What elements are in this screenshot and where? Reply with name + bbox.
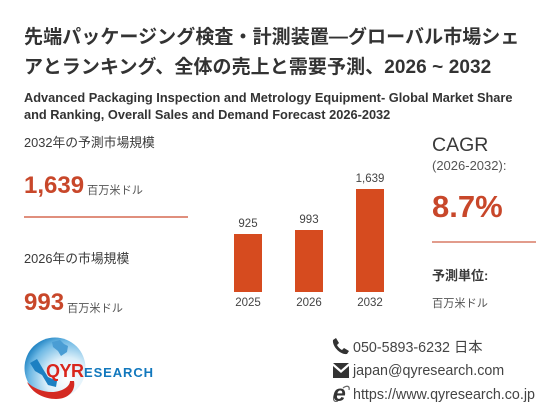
unit: million USD 2026: 百万米ドル [67, 303, 123, 315]
title: 先端パッケージング検査・計測装置—グローバル市場シェ [24, 27, 520, 48]
year: 2026: 2026 [296, 297, 322, 309]
divider: left [24, 216, 188, 218]
value: 993: 993 [24, 289, 64, 316]
title: アとランキング、全体の売上と需要予測、2026 ~ 2032 [24, 56, 491, 78]
value label: 925: 925 [238, 218, 258, 230]
bar: 2032 [356, 189, 384, 292]
logo: QYResearch [24, 338, 153, 399]
value label: 993: 993 [299, 214, 319, 226]
value: 8.7%: 8.7% [432, 189, 503, 224]
label: CAGR: CAGR [432, 134, 488, 156]
unit: million USD: 百万米ドル [87, 185, 143, 197]
logo: QYResearch: QYR [46, 361, 84, 381]
value label: 1,639: 1,639 [356, 173, 384, 185]
value: 1,639: 1,639 [24, 172, 84, 199]
value: forecast unit: 百万米ドル [432, 298, 488, 310]
divider: right [432, 241, 536, 243]
label: 2026 market size: 2026年の市場規模 [24, 251, 129, 266]
year: 2032: 2032 [357, 297, 383, 309]
year: 2025: 2025 [235, 297, 261, 309]
text: phone: 050-5893-6232 日本 [353, 340, 483, 356]
subtitle: and Ranking, Overall Sales and Demand Forecast 2026-2032 [24, 107, 390, 122]
text: website: https://www.qyresearch.co.jp [353, 387, 535, 403]
bar: 2026 [295, 230, 323, 292]
panel: 2026 market size [24, 251, 129, 316]
label: forecast unit: 予測単位: [432, 268, 488, 282]
subtitle: Advanced Packaging Inspection and Metrology Equipment- Global Market Share [24, 90, 513, 105]
subtitle [24, 90, 513, 122]
label: 2032 forecast: 2032年の予測市場規模 [24, 135, 155, 150]
red swoosh [27, 381, 74, 399]
icon: mail [333, 363, 349, 378]
continents [52, 340, 68, 356]
bar chart [234, 173, 384, 309]
title [24, 26, 520, 78]
logo: QYResearch: ESEARCH [84, 365, 153, 380]
text: email: japan@qyresearch.com [353, 363, 504, 379]
panel: CAGR [432, 134, 506, 224]
label: CAGR period: (2026-2032): [432, 158, 506, 173]
bar: 2025 [234, 234, 262, 292]
panel: 2032 forecast market size [24, 135, 155, 199]
icon: phone [332, 338, 349, 354]
